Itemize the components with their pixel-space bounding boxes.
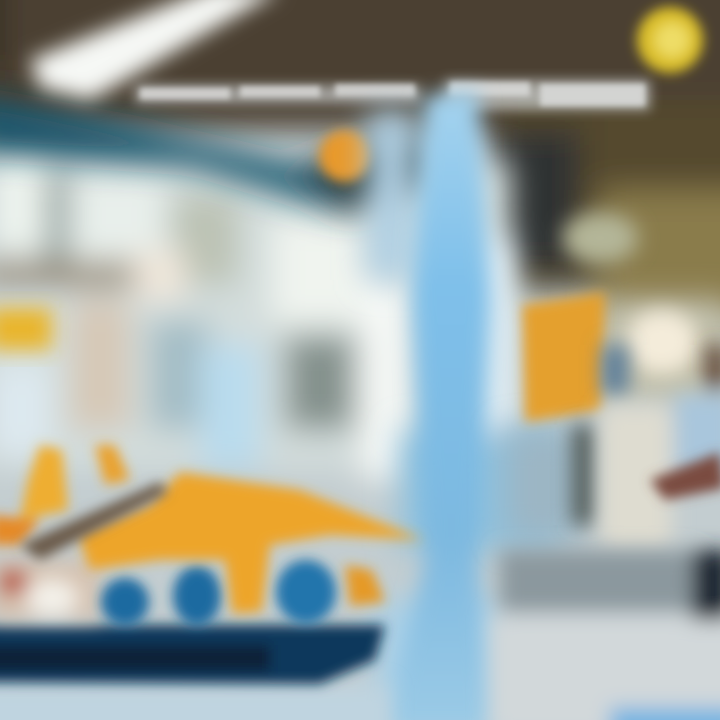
pale lamp right bbox=[562, 212, 638, 264]
blurred title band bbox=[135, 80, 650, 110]
title glow bbox=[135, 80, 650, 110]
boat hull bbox=[0, 625, 385, 684]
right background blur bbox=[505, 300, 720, 540]
waterfall side glow bbox=[368, 110, 560, 720]
title word blocks bbox=[140, 82, 645, 106]
ceiling bbox=[0, 0, 720, 320]
yellow side sign bbox=[0, 308, 52, 350]
yellow lamp bbox=[637, 7, 703, 73]
dark post bbox=[572, 345, 628, 525]
blue domes bbox=[101, 560, 336, 626]
white and red base bbox=[0, 560, 100, 620]
worker figure bbox=[600, 345, 720, 550]
ceiling skylight streak bbox=[30, 0, 280, 100]
waterfall bbox=[385, 90, 490, 720]
floor bbox=[0, 550, 720, 720]
windows area bbox=[0, 150, 510, 480]
dark teal beam bbox=[0, 95, 430, 215]
orange lamp bbox=[319, 130, 371, 182]
worker helmet bbox=[626, 310, 698, 374]
dark strut bbox=[20, 482, 168, 560]
orange panel bbox=[522, 292, 605, 422]
orange structure bbox=[0, 445, 424, 614]
